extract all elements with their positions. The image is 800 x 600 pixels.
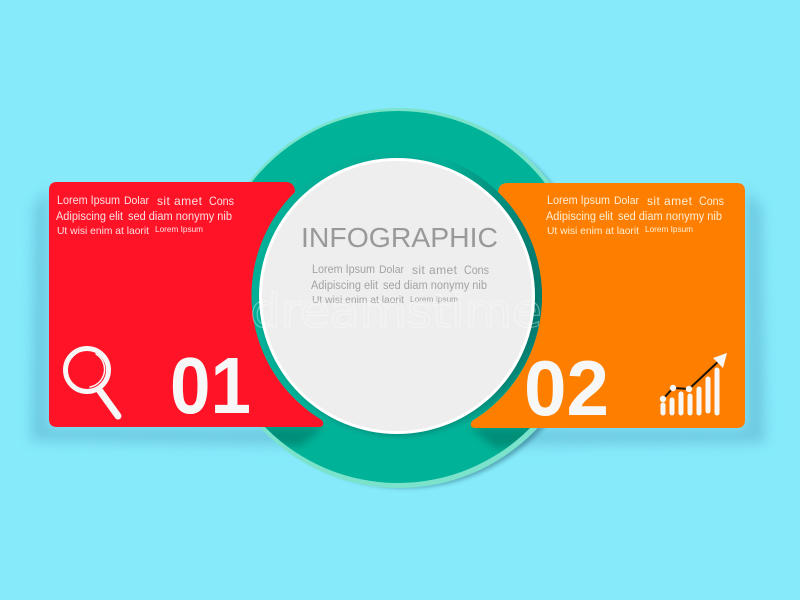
center text — [311, 263, 489, 306]
orange card text: Dolar — [614, 195, 639, 207]
ring — [248, 108, 554, 490]
icon: magnifying glass — [66, 348, 118, 416]
number 02: 02 — [524, 344, 609, 432]
center text: sit amet — [412, 263, 458, 277]
orange card text — [546, 194, 724, 237]
center text: sed diam nonymy nib — [383, 280, 487, 292]
red card text: sit amet — [157, 194, 203, 208]
title: INFOGRAPHIC — [301, 222, 498, 253]
orange card text: Cons — [699, 196, 724, 208]
shadows cast on ring by panels — [255, 427, 545, 448]
center text: Adipiscing elit — [311, 280, 379, 292]
orange card text: Lorem Ipsum — [547, 195, 610, 207]
center text: Dolar — [379, 264, 404, 276]
center circle face — [262, 161, 532, 431]
red card text: Lorem Ipsum — [155, 224, 203, 234]
center text: Ut wisi enim at laorit — [312, 294, 404, 306]
red card text: Ut wisi enim at laorit — [57, 225, 149, 237]
infographic canvas — [28, 108, 768, 490]
panel shadows — [31, 188, 765, 445]
orange card background — [471, 183, 745, 428]
number 01: 01 — [170, 341, 251, 430]
center circle shadow — [261, 160, 537, 436]
watermark: dreamstime — [250, 284, 542, 338]
center circle — [252, 151, 542, 441]
orange card text: sit amet — [647, 194, 693, 208]
center text: Cons — [464, 265, 489, 277]
orange card text: Adipiscing elit — [546, 211, 614, 223]
orange card text: Ut wisi enim at laorit — [547, 225, 639, 237]
orange card text: sed diam nonymy nib — [618, 211, 722, 223]
red card text: Lorem Ipsum — [57, 195, 120, 207]
red card text: Cons — [209, 196, 234, 208]
center text: Lorem Ipsum — [410, 294, 458, 304]
red card text — [56, 194, 234, 237]
center text: Lorem Ipsum — [312, 264, 375, 276]
panel: red card 01 — [49, 182, 323, 430]
ring teal band — [212, 111, 584, 483]
red card text: Adipiscing elit — [56, 211, 124, 223]
panel: orange card 02 — [471, 183, 745, 432]
ring light rim — [209, 108, 589, 488]
red card text: sed diam nonymy nib — [128, 211, 232, 223]
red card background — [49, 182, 323, 427]
red card text: Dolar — [124, 195, 149, 207]
center circle teal rim — [252, 151, 542, 441]
ring shadow — [219, 114, 593, 488]
orange card text: Lorem Ipsum — [645, 224, 693, 234]
icon: rising bar chart — [660, 353, 727, 413]
center circle white edge — [259, 158, 535, 434]
